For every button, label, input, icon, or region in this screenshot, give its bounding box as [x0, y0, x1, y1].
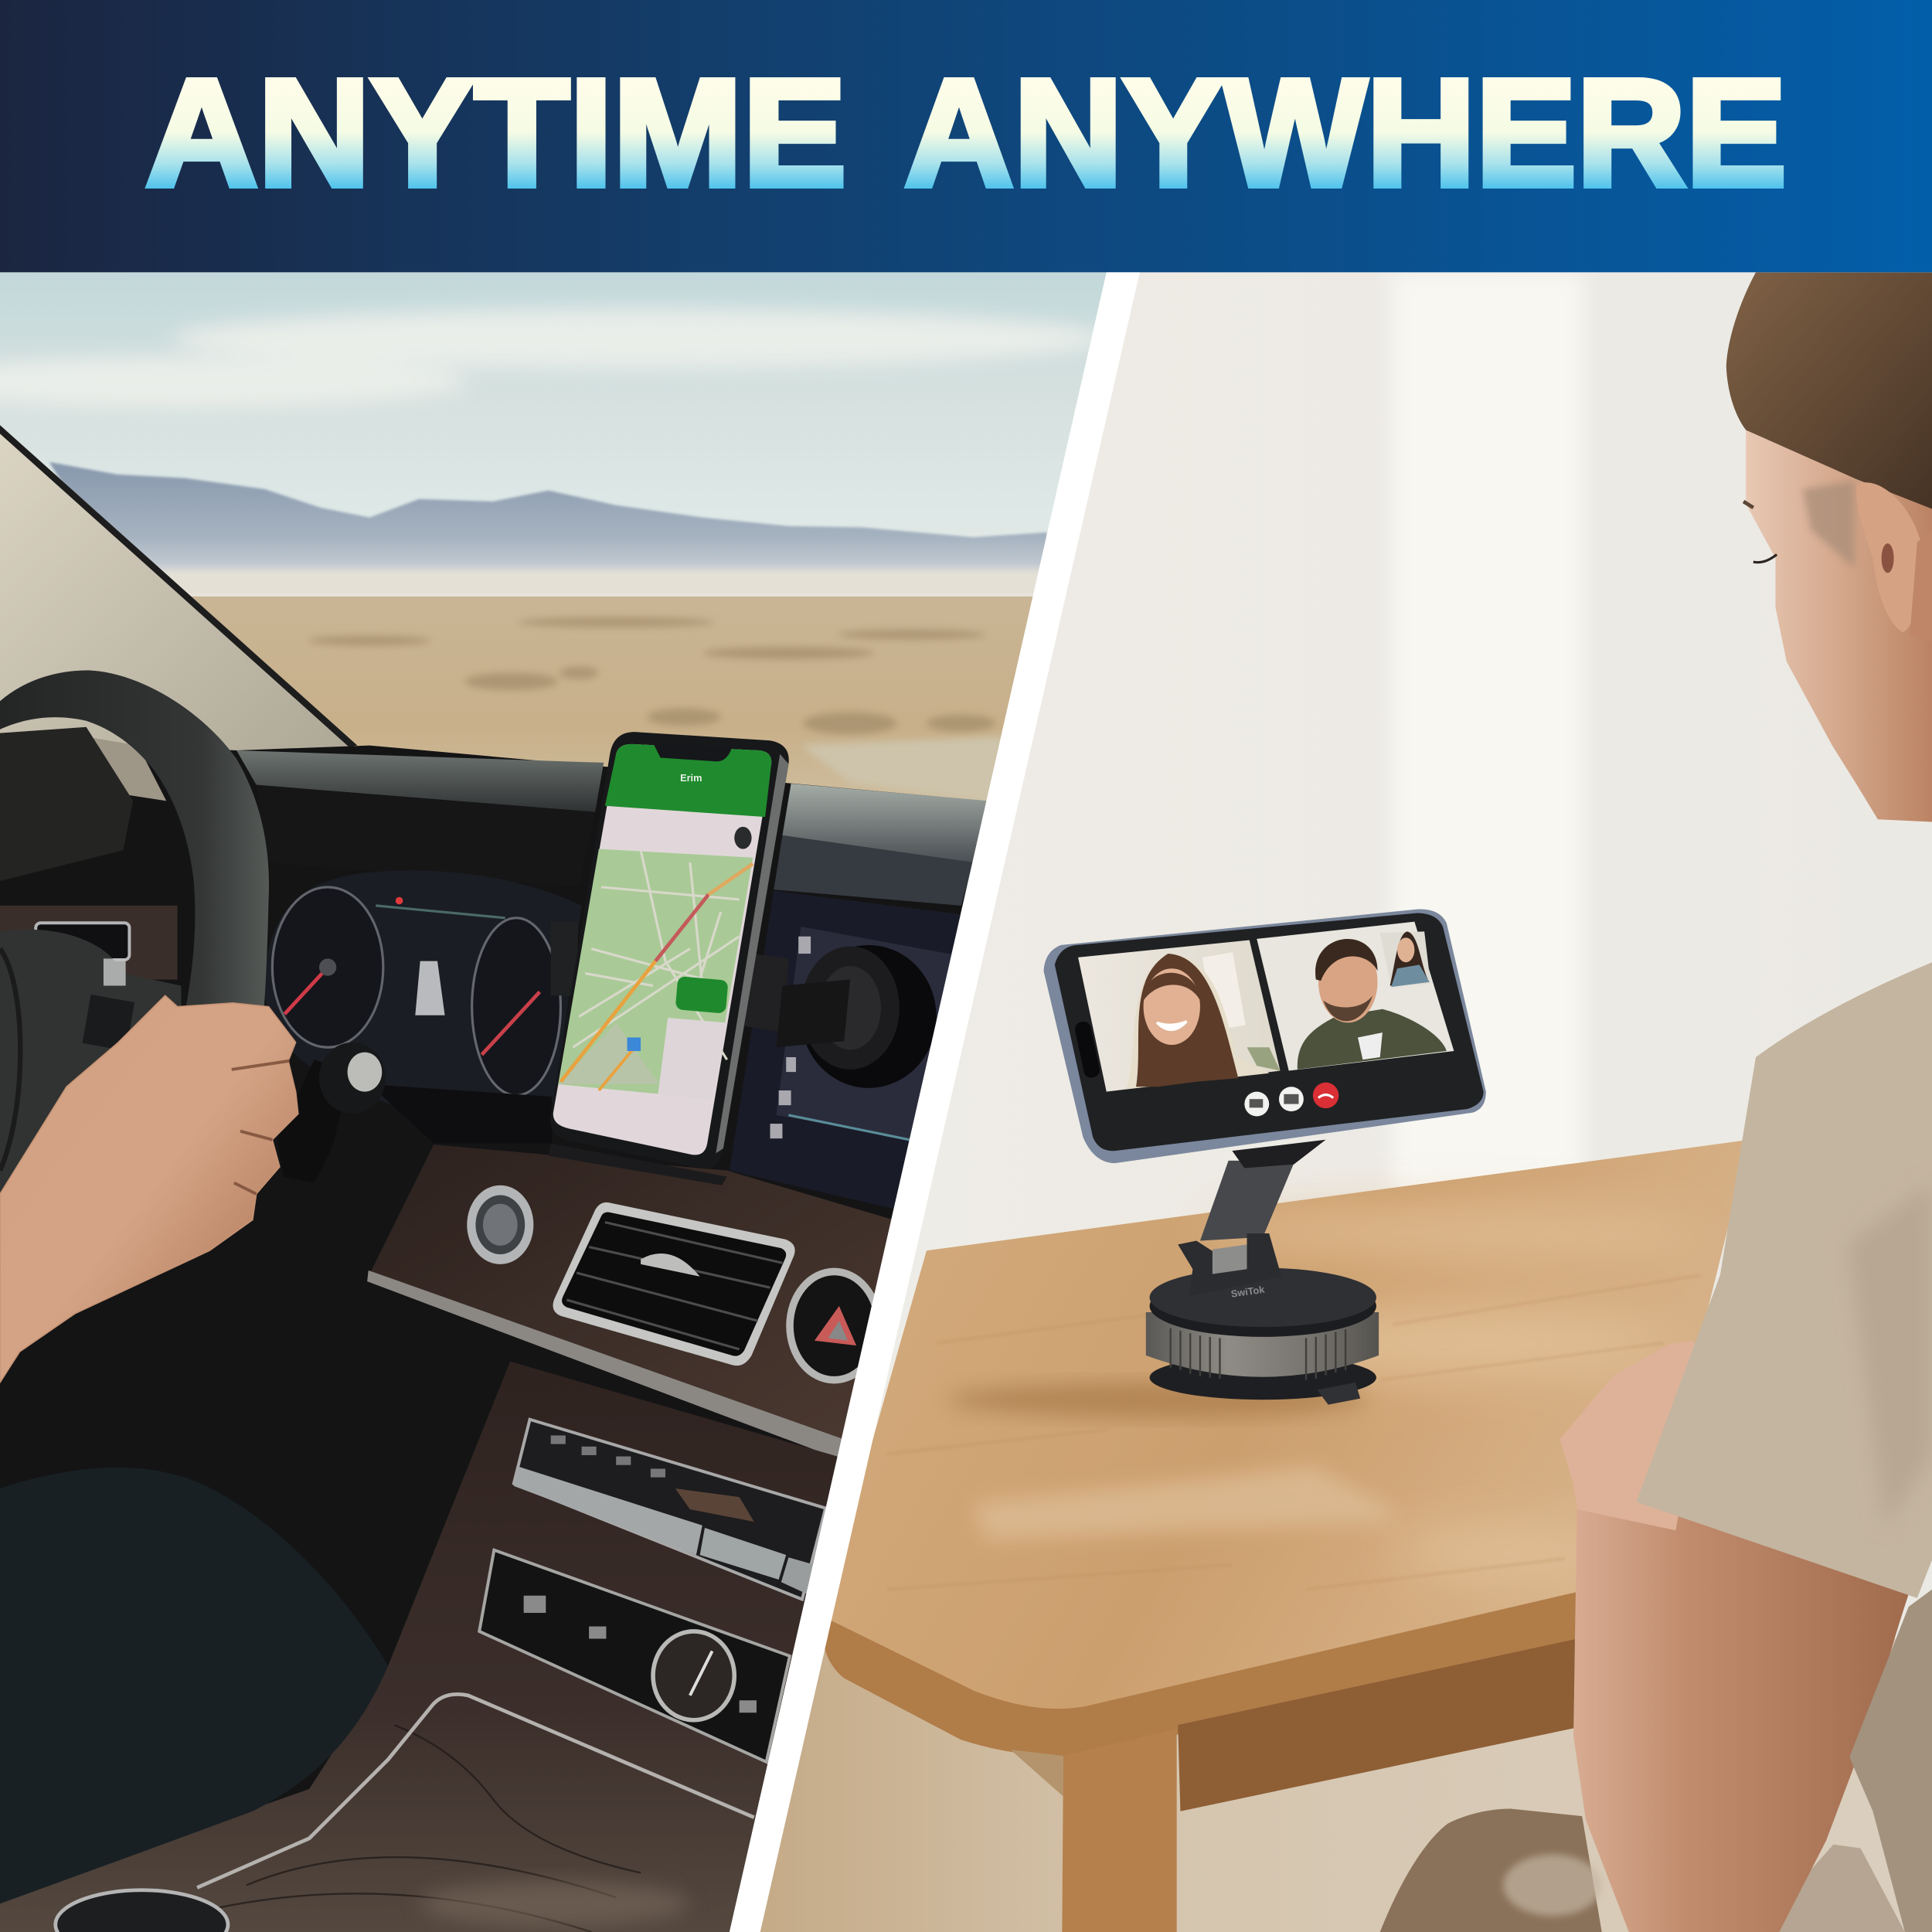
air vent — [553, 1202, 795, 1366]
chair seat — [1774, 1845, 1905, 1932]
dashboard — [0, 740, 986, 1932]
sideburn — [1803, 481, 1855, 568]
dash top pad — [236, 750, 604, 812]
mountains — [49, 462, 1047, 582]
chrome strip — [367, 1270, 850, 1461]
charging cable — [197, 1694, 754, 1888]
driver's hand and arm — [0, 995, 298, 1383]
gear selector — [56, 1890, 228, 1932]
clamp — [1232, 1140, 1326, 1168]
analog clock — [653, 1631, 734, 1720]
hair — [1726, 272, 1932, 509]
ear — [1856, 482, 1924, 632]
panel: video call at the desk — [740, 272, 1932, 1932]
hinge — [1178, 1233, 1281, 1296]
lower wall — [740, 1639, 1932, 1932]
pants — [1380, 1809, 1602, 1932]
desk stand — [1146, 1140, 1379, 1405]
base top — [1150, 1275, 1376, 1337]
wood grain — [887, 1275, 1700, 1590]
clouds — [0, 309, 1109, 406]
speedometer — [272, 887, 383, 1047]
call buttons — [1244, 1083, 1338, 1117]
instrument cluster — [265, 870, 581, 1104]
finger creases — [232, 1061, 290, 1194]
shirt shade — [1849, 1183, 1932, 1528]
head and face — [1746, 419, 1932, 821]
desert ground — [192, 597, 1032, 804]
desk stand: SwiTok — [1230, 1284, 1266, 1300]
knurled ring — [1146, 1312, 1379, 1377]
climate buttons — [514, 1420, 825, 1600]
header band — [0, 0, 1932, 272]
table leg — [1062, 1729, 1177, 1932]
center screen — [730, 891, 961, 1213]
phone with navigation app — [550, 732, 789, 1168]
sky — [0, 272, 1107, 538]
woman in t-shirt — [1380, 272, 1932, 1932]
wall light streak — [1393, 272, 1583, 1209]
table top — [822, 1140, 1750, 1716]
wood grain — [160, 1725, 641, 1932]
wood trim — [371, 1145, 893, 1454]
shirt body — [1849, 1590, 1932, 1932]
search button — [734, 827, 752, 849]
tachometer — [472, 918, 560, 1095]
divider — [730, 272, 1140, 1932]
title: ANYWHERE — [904, 47, 1787, 218]
steering wheel — [0, 670, 269, 1013]
title — [145, 47, 1787, 218]
lower console wood — [0, 1362, 850, 1932]
arm — [1573, 1485, 1912, 1932]
green app header — [605, 744, 771, 817]
route chip — [675, 976, 729, 1014]
video tile: woman — [1078, 940, 1281, 1092]
app title: Erim — [680, 772, 702, 784]
camera pill — [1073, 1020, 1101, 1079]
base bottom — [1150, 1355, 1376, 1400]
video tile: man — [1257, 922, 1454, 1071]
horizon haze — [123, 570, 1060, 599]
picture-in-picture — [1380, 931, 1430, 987]
sunlit patch — [974, 1466, 1393, 1540]
stand shadow — [949, 1383, 1368, 1417]
interior behind steering wheel — [0, 727, 181, 1232]
eye detail — [1743, 502, 1777, 563]
table edge — [822, 1592, 1577, 1757]
table apron — [1178, 1639, 1577, 1811]
phone on stand — [1043, 910, 1486, 1163]
hazard button — [786, 1268, 883, 1383]
start button — [467, 1185, 533, 1264]
list panel — [658, 1018, 727, 1099]
car icon on cluster — [415, 961, 445, 1015]
gear stalk — [277, 1043, 386, 1183]
suction lever — [1317, 1383, 1360, 1405]
title: ANYTIME — [145, 47, 846, 218]
panel: driving in the car with phone mount — [0, 272, 1109, 1932]
table highlights — [1207, 1210, 1700, 1577]
app screen — [553, 744, 771, 1155]
map — [558, 849, 753, 1099]
a-pillar — [0, 425, 357, 754]
wall — [740, 272, 1932, 1932]
sunlit wood streak — [419, 1882, 690, 1926]
driver's leg — [0, 1468, 388, 1903]
road strip — [801, 736, 1004, 804]
phone mount — [549, 922, 937, 1185]
hand — [1560, 1341, 1706, 1530]
media controls — [479, 1550, 790, 1762]
stand arm — [1200, 1161, 1295, 1241]
t-shirt — [1636, 962, 1932, 1598]
